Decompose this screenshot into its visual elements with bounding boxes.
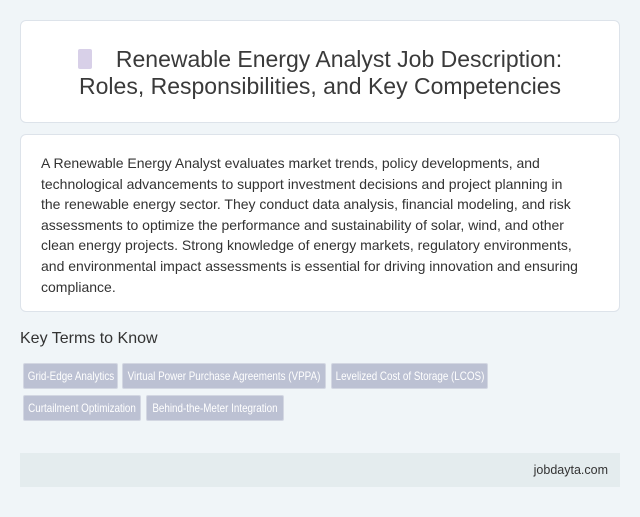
tag 3	[331, 363, 488, 389]
footer	[20, 453, 620, 487]
title: Renewable Energy Analyst Job Description:	[116, 46, 562, 72]
header panel	[20, 20, 620, 123]
tag 2	[122, 363, 326, 389]
icon: document	[78, 49, 92, 69]
tag 3: Levelized Cost of Storage (LCOS)	[335, 369, 484, 383]
title: Roles, Responsibilities, and Key Competencies	[79, 73, 561, 99]
tag 1: Grid-Edge Analytics	[27, 369, 114, 383]
tag 5: Behind-the-Meter Integration	[152, 401, 278, 415]
title	[78, 46, 562, 99]
heading: key terms: Key Terms to Know	[20, 330, 158, 347]
description panel	[20, 134, 620, 312]
tag 1	[23, 363, 118, 389]
footer source: jobdayta.com	[534, 463, 608, 477]
description text: A Renewable Energy Analyst evaluates market trends, policy developments, and technological advancements to support investment decisions and project planning in the renewable energy sector. They conduct data analysis, financial modeling, and risk assessments to optimize the performance and sustainability of solar, wind, and other clean energy projects. Strong knowledge of energy markets, regulatory environments, and environmental impact assessments is essential for driving innovation and ensuring compliance.	[41, 155, 578, 295]
tag 5	[146, 395, 284, 421]
tag 4	[23, 395, 141, 421]
tag 2: Virtual Power Purchase Agreements (VPPA)	[128, 369, 320, 383]
tag 4: Curtailment Optimization	[28, 401, 136, 415]
